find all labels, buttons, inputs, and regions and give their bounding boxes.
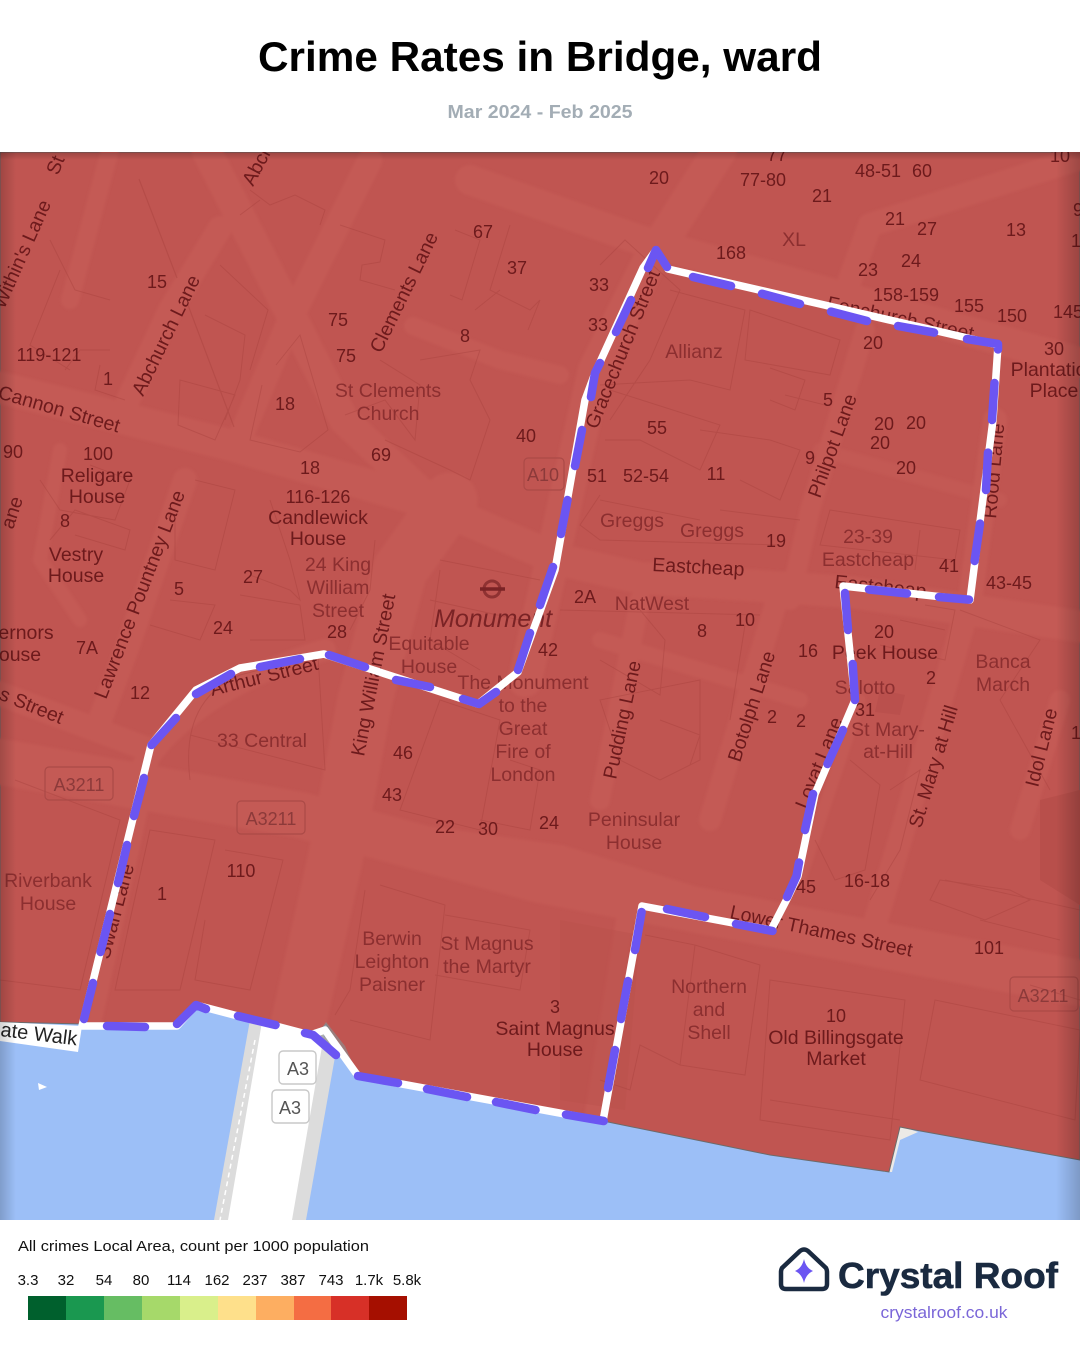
house numbers: 1	[157, 884, 167, 904]
house numbers: 10	[735, 610, 755, 630]
building names, lighter: The Monument	[457, 672, 589, 694]
legend value labels: 54	[96, 1272, 112, 1289]
building names, lighter: William	[307, 577, 369, 599]
house numbers: 51	[587, 466, 607, 486]
building names, lighter: 33 Central	[217, 730, 307, 752]
house numbers: 101	[974, 938, 1004, 958]
building names, lighter: Paisner	[359, 974, 426, 996]
bridge road shields: A3	[279, 1098, 301, 1118]
house numbers: 24	[213, 618, 233, 638]
house numbers: 10	[826, 1006, 846, 1026]
street name labels	[0, 106, 1062, 962]
street name labels: Abchurch Lane	[128, 272, 205, 399]
house numbers: 33	[588, 315, 608, 335]
building names, dark: Peek House	[832, 642, 938, 664]
bridge road	[214, 1020, 338, 1220]
building names, lighter: Great	[499, 718, 548, 740]
building names, dark: ouse	[0, 644, 41, 666]
street name labels: Lower Thames Street	[728, 901, 915, 962]
legend colour scale	[28, 1296, 407, 1320]
building names, lighter	[4, 229, 1031, 1044]
legend value labels: 5.8k	[393, 1272, 422, 1289]
legend value labels: 743	[318, 1272, 344, 1289]
bridge road shields: A3	[287, 1059, 309, 1079]
building names, lighter: St Magnus	[440, 933, 534, 955]
house numbers: 75	[328, 310, 348, 330]
house numbers: 168	[716, 243, 746, 263]
legend value labels: 114	[167, 1272, 191, 1289]
road shields: A10	[527, 465, 559, 485]
building names, dark: Saint Magnus	[495, 1018, 615, 1040]
logo	[781, 1250, 1059, 1322]
street name labels: Botolph Lane	[724, 648, 780, 765]
building names, lighter: Peninsular	[588, 809, 681, 831]
house numbers: 75	[336, 346, 356, 366]
house numbers: 20	[874, 622, 894, 642]
house numbers: 1	[103, 369, 113, 389]
building names, lighter: 24 King	[305, 554, 371, 576]
building names, lighter: at-Hill	[863, 741, 913, 763]
house numbers: 15	[147, 272, 167, 292]
building names, dark: House	[290, 528, 346, 550]
street name labels: Lovat Lane	[791, 714, 848, 812]
street name labels: Abchurch	[238, 106, 296, 189]
street name labels: Arthur Street	[208, 653, 321, 701]
street name labels: St	[42, 152, 70, 178]
house numbers: 2	[796, 711, 806, 731]
building names, lighter: Leighton	[355, 951, 429, 973]
icon: underground station	[480, 581, 505, 597]
house numbers: 41	[939, 556, 959, 576]
building names, dark: House	[527, 1039, 583, 1061]
road shields: A3211	[246, 809, 296, 829]
street name labels: Clements Lane	[366, 229, 443, 356]
building names, lighter: Riverbank	[4, 870, 92, 892]
house numbers: 10	[1050, 146, 1070, 166]
building names, dark: Place	[1030, 380, 1078, 402]
street name labels: St. Mary at Hill	[905, 703, 963, 830]
house numbers: 24	[539, 813, 559, 833]
title: Crime Rates in Bridge, ward	[258, 33, 822, 80]
house numbers: 22	[435, 817, 455, 837]
house numbers: 31	[855, 700, 875, 720]
subtitle: date range: Mar 2024 - Feb 2025	[448, 101, 632, 122]
building names, lighter: and	[693, 999, 725, 1021]
building names, lighter: Equitable	[388, 633, 470, 655]
house numbers: 7A	[76, 638, 98, 658]
building names, dark: House	[48, 565, 104, 587]
street name labels: Eastcheap	[833, 571, 928, 603]
house numbers: 45	[796, 877, 816, 897]
legend title: All crimes Local Area, count per 1000 population	[18, 1238, 369, 1255]
building names, lighter: March	[976, 674, 1030, 696]
street name labels: Pudding Lane	[599, 659, 646, 781]
legend value labels: 80	[133, 1272, 149, 1289]
street name labels: Monument	[434, 605, 553, 633]
house numbers: 30	[478, 819, 498, 839]
house numbers: 37	[507, 258, 527, 278]
crime choropleth area	[0, 152, 1080, 1172]
house numbers: 16	[798, 641, 818, 661]
house numbers: 2	[926, 668, 936, 688]
house numbers: 16-18	[844, 871, 890, 891]
house numbers: 2A	[574, 587, 596, 607]
house numbers: 48-51	[855, 161, 901, 181]
legend value labels	[18, 1272, 422, 1289]
building names, lighter: to the	[499, 695, 547, 717]
house numbers: 11	[707, 464, 725, 484]
building names, lighter: Banca	[975, 651, 1031, 673]
house numbers: 27	[917, 219, 937, 239]
building names, dark: Religare	[61, 465, 133, 487]
legend value labels: 1.7k	[355, 1272, 384, 1289]
house numbers: 12	[130, 683, 150, 703]
house numbers: 116-126	[286, 487, 350, 507]
building names, lighter: Greggs	[600, 510, 664, 532]
house numbers: 20	[906, 413, 926, 433]
road shields	[45, 458, 1078, 1011]
house numbers: 90	[3, 442, 23, 462]
website url: crystalroof.co.uk	[880, 1303, 1008, 1322]
house numbers: 119-121	[17, 345, 81, 365]
house numbers: 40	[516, 426, 536, 446]
legend value labels: 162	[204, 1272, 230, 1289]
house numbers: 42	[538, 640, 558, 660]
house numbers: 20	[870, 433, 890, 453]
building names, lighter: London	[490, 764, 556, 786]
building names, lighter: St Mary-	[851, 719, 925, 741]
building names, lighter: Eastcheap	[822, 549, 914, 571]
building names, dark: Market	[806, 1048, 866, 1070]
building names, dark: Vestry	[49, 544, 103, 566]
street name labels: Fenchurch Street	[825, 292, 976, 345]
house numbers: 158-159	[873, 285, 939, 305]
building names, lighter: Church	[357, 403, 419, 425]
house numbers: 67	[473, 222, 493, 242]
house numbers: 30	[1044, 339, 1064, 359]
bridge corner marker	[320, 1022, 352, 1060]
street name labels: Philpot Lane	[804, 391, 862, 501]
house numbers: 21	[812, 186, 832, 206]
house numbers: 110	[227, 861, 255, 881]
house numbers: 43-45	[986, 573, 1032, 593]
building names, lighter: Berwin	[362, 928, 422, 950]
darker building blocks	[560, 690, 1080, 1110]
street name labels: Gracechurch Street	[581, 266, 665, 432]
building names, dark: House	[69, 486, 125, 508]
street name labels: Eastcheap	[652, 554, 745, 581]
house numbers: 150	[997, 306, 1027, 326]
icon: house with star	[781, 1250, 827, 1289]
street label: Walk: ate Walk	[0, 1019, 80, 1050]
building names, lighter: House	[20, 893, 76, 915]
building names, dark: Old Billingsgate	[768, 1027, 904, 1049]
house numbers: 20	[649, 168, 669, 188]
house numbers: 21	[885, 209, 905, 229]
building names, lighter: House	[606, 832, 662, 854]
house numbers: 55	[647, 418, 667, 438]
house numbers: 8	[460, 326, 470, 346]
building outlines	[0, 179, 1080, 1140]
building names, lighter: Allianz	[665, 341, 723, 363]
house numbers: 77-80	[740, 170, 786, 190]
river water	[0, 1010, 1080, 1220]
house numbers: 9	[805, 448, 815, 468]
building names, lighter: Northern	[671, 976, 747, 998]
legend value labels: 237	[242, 1272, 268, 1289]
road shields: A3211	[54, 775, 104, 795]
house numbers: 155	[954, 296, 984, 316]
house numbers: 5	[823, 390, 833, 410]
house numbers: 18	[300, 458, 320, 478]
legend	[18, 1238, 422, 1320]
building names, lighter: XL	[782, 229, 806, 251]
house numbers: 69	[371, 445, 391, 465]
building names, dark	[0, 359, 1080, 1070]
legend value labels: 32	[58, 1272, 74, 1289]
street label: Walk	[0, 1019, 82, 1090]
house numbers: 19	[766, 531, 786, 551]
house numbers: 52-54	[623, 466, 669, 486]
building names, lighter: 23-39	[843, 526, 893, 548]
building names, lighter: House	[401, 656, 457, 678]
house numbers: 8	[697, 621, 707, 641]
legend value labels: 3.3	[18, 1272, 38, 1289]
ward boundary line	[82, 250, 998, 1121]
house numbers: 5	[174, 579, 184, 599]
building names, lighter: NatWest	[615, 593, 690, 615]
road network	[0, 152, 1080, 1028]
building names, dark: Candlewick	[268, 507, 368, 529]
house numbers: 23	[858, 260, 878, 280]
house numbers: 60	[912, 161, 932, 181]
house numbers: 46	[393, 743, 413, 763]
building names, lighter: Shell	[687, 1022, 731, 1044]
house numbers: 27	[243, 567, 263, 587]
land white edge	[884, 1126, 918, 1172]
house numbers: 8	[60, 511, 70, 531]
legend value labels: 387	[280, 1272, 306, 1289]
house numbers: 20	[896, 458, 916, 478]
street name labels: Lawrence Pountney Lane	[90, 487, 190, 702]
logo wordmark: Crystal Roof	[838, 1255, 1059, 1296]
house numbers: 77	[767, 145, 787, 165]
house numbers: 20	[863, 333, 883, 353]
street name labels: King William Street	[347, 591, 400, 758]
map edge vignette	[0, 152, 1080, 1220]
street name labels: Idol Lane	[1022, 706, 1062, 789]
building names, lighter: Fire of	[495, 741, 551, 763]
house numbers: 33	[589, 275, 609, 295]
house numbers: 43	[382, 785, 402, 805]
building names, lighter: Salotto	[835, 677, 896, 699]
house numbers: 2	[767, 707, 777, 727]
bridge road shields	[272, 1051, 316, 1123]
house numbers: 28	[327, 622, 347, 642]
house numbers: 3	[550, 997, 560, 1017]
street name labels: Swan Lane	[93, 861, 139, 961]
house numbers: 100	[83, 444, 113, 464]
house numbers	[3, 145, 1080, 1026]
building names, lighter: the Martyr	[443, 956, 531, 978]
house numbers: 13	[1006, 220, 1026, 240]
road shields: A3211	[1018, 986, 1068, 1006]
house numbers: 20	[874, 414, 894, 434]
street name labels: Rood Lane	[979, 422, 1009, 519]
building names, lighter: Greggs	[680, 520, 744, 542]
house numbers: 18	[275, 394, 295, 414]
building names, dark: ernors	[0, 622, 54, 644]
building names, lighter: St Clements	[335, 380, 441, 402]
house numbers: 24	[901, 251, 921, 271]
building names, lighter: Street	[312, 600, 365, 622]
